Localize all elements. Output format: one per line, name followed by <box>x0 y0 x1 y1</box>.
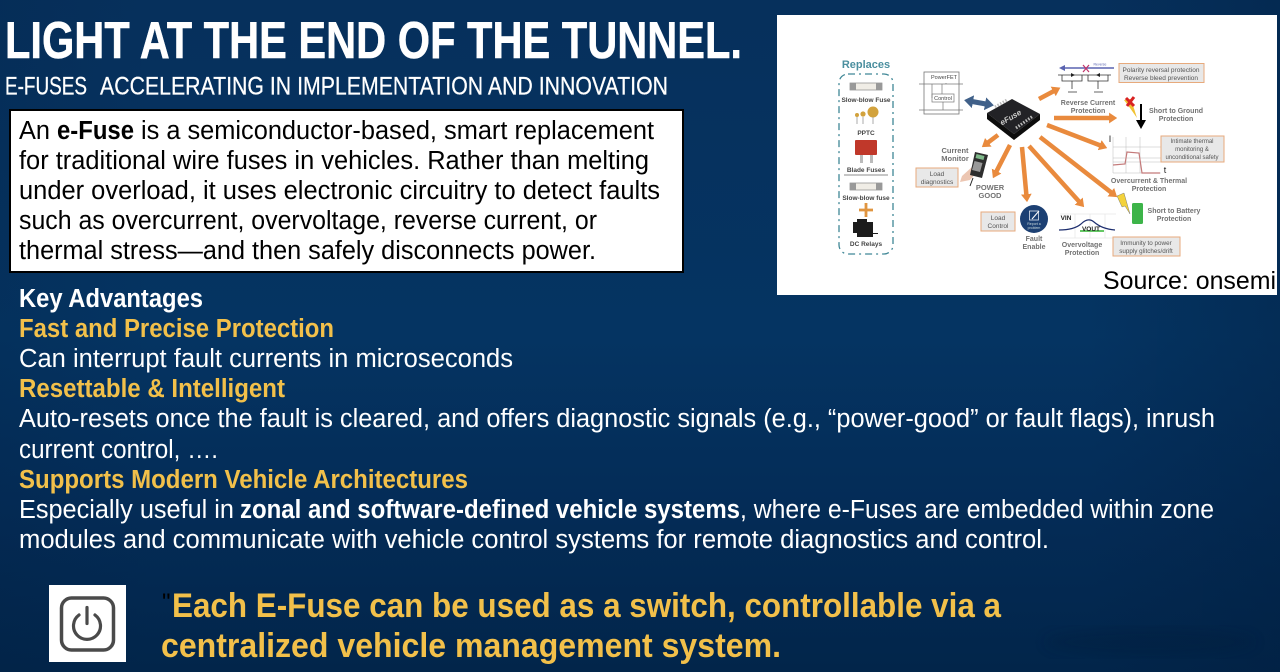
load control box: Load <box>991 215 1006 222</box>
panel: e-Fuse definition: e-Fuse <box>57 117 134 145</box>
immunity box: Immunity to power <box>1120 240 1172 247</box>
panel: e-Fuse definition <box>10 110 683 272</box>
thermal box: unconditional safety <box>1165 155 1219 161</box>
short to battery: Short to Battery <box>1148 208 1201 215</box>
polarity box: Polarity reversal protection <box>1123 67 1200 74</box>
overvoltage chart: VIN <box>1061 215 1072 222</box>
replaces column <box>839 59 893 254</box>
panel: e-Fuse definition: is a semiconductor-based, smart replacement <box>141 117 654 145</box>
advantage: resettable <box>19 375 1215 464</box>
advantage: resettable: Resettable & Intelligent <box>19 375 285 403</box>
advantage: modern architectures <box>19 466 1214 554</box>
overvoltage chart <box>1059 214 1116 257</box>
overcurrent chart: Overcurrent & Thermal <box>1111 178 1187 185</box>
advantage: modern architectures: Especially useful in <box>19 496 234 524</box>
advantage: modern architectures: zonal and software-defined vehicle systems <box>240 496 740 524</box>
quote <box>161 587 1002 665</box>
fault enable: Fault <box>1026 236 1043 243</box>
advantage: modern architectures: Supports Modern Vehicle Architectures <box>19 466 468 494</box>
reverse current protection: Reverse Current <box>1061 100 1116 107</box>
overcurrent chart: I <box>1109 134 1111 144</box>
polarity box <box>1119 64 1204 82</box>
thermal box: monitoring & <box>1175 147 1209 153</box>
key advantages heading: Key Advantages <box>19 285 203 313</box>
fault enable: problem <box>1028 226 1040 230</box>
load diagnostics box: diagnostics <box>921 179 954 186</box>
quote: Each E-Fuse can be used as a switch, controllable via a <box>172 587 1002 625</box>
overcurrent chart <box>1109 134 1187 193</box>
overvoltage chart: Protection <box>1065 250 1099 257</box>
chip: eFuse <box>998 108 1023 127</box>
load control box <box>981 212 1015 231</box>
panel: e-Fuse definition: under overload, it uses electronic circuitry to detect faults <box>19 177 660 205</box>
title: LIGHT AT THE END OF THE TUNNEL. <box>5 12 742 70</box>
current monitor: Monitor <box>941 154 969 163</box>
panel: e-Fuse definition: such as overcurrent, overvoltage, reverse current, or <box>19 207 597 235</box>
load control box: Control <box>988 223 1009 230</box>
overvoltage chart: VOUT <box>1082 226 1100 233</box>
overcurrent chart: t <box>1164 165 1167 175</box>
replaces column: DC Relays <box>850 241 882 248</box>
overcurrent chart: Protection <box>1132 186 1166 193</box>
reverse current protection <box>1058 62 1116 115</box>
icon: power button <box>49 585 126 662</box>
quote: centralized vehicle management system. <box>161 627 781 665</box>
panel: e-Fuse definition: thermal stress—and then safely disconnects power. <box>19 237 596 265</box>
short to battery: Protection <box>1157 216 1191 223</box>
chip <box>987 99 1040 140</box>
short to battery <box>1117 193 1201 224</box>
panel: e-Fuse definition: for traditional wire fuses in vehicles. Rather than melting <box>19 147 649 175</box>
reverse current protection: Protection <box>1071 108 1105 115</box>
advantage: modern architectures: modules and communicate with vehicle control systems for remote diagnostics and control. <box>19 526 1049 554</box>
load diagnostics box <box>916 168 958 187</box>
panel: e-Fuse definition: An <box>19 117 50 145</box>
diagram artwork <box>839 59 1224 257</box>
immunity box <box>1113 237 1180 256</box>
short to ground <box>1124 97 1203 129</box>
source credit: Source: onsemi <box>1103 267 1276 295</box>
load diagnostics box: Load <box>930 171 945 178</box>
subtitle: ACCELERATING IN IMPLEMENTATION AND INNOVATION <box>100 72 668 100</box>
replaces column: Blade Fuses <box>847 167 886 174</box>
thermal box: Intimate thermal <box>1170 139 1214 145</box>
fault enable: Report a <box>1027 222 1041 226</box>
replaces column: Replaces <box>842 59 890 71</box>
advantage: fast and precise <box>19 315 513 373</box>
arrows <box>988 91 1112 202</box>
current monitor <box>941 146 988 186</box>
quote: " <box>162 589 171 616</box>
blue double arrow <box>972 102 986 104</box>
overvoltage chart: Overvoltage <box>1062 242 1102 249</box>
PowerFET schematic: PowerFET <box>931 75 958 81</box>
advantage: modern architectures: , where e-Fuses are embedded within zone <box>740 496 1214 524</box>
advantage: resettable: Auto-resets once the fault is cleared, and offers diagnostic signals (e.g., “power-good” or fault flags), inrush <box>19 405 1215 433</box>
reverse current protection: Reverse <box>1093 62 1107 66</box>
current monitor: Current <box>941 146 969 155</box>
advantage: fast and precise: Can interrupt fault currents in microseconds <box>19 345 513 373</box>
replaces column: PPTC <box>857 130 875 137</box>
power good label <box>976 183 1005 200</box>
power good label: GOOD <box>979 191 1002 200</box>
short to ground: Protection <box>1159 116 1193 123</box>
PowerFET schematic <box>919 72 963 114</box>
advantage: resettable: current control, …. <box>19 436 218 464</box>
replaces column: Slow-blow fuse <box>842 195 890 202</box>
advantage: fast and precise: Fast and Precise Protection <box>19 315 334 343</box>
short to ground: Short to Ground <box>1149 108 1203 115</box>
fault enable: Enable <box>1023 244 1046 251</box>
panel: e-Fuse diagram image <box>777 15 1277 295</box>
power good label: POWER <box>976 183 1005 192</box>
thermal box <box>1161 136 1224 162</box>
immunity box: supply glitches/drift <box>1119 248 1173 255</box>
fault enable <box>1020 205 1048 251</box>
subtitle: E-FUSES <box>5 72 87 100</box>
replaces column: Slow-blow Fuse <box>841 97 891 104</box>
PowerFET schematic: Control <box>934 96 952 102</box>
polarity box: Reverse bleed prevention <box>1124 75 1198 82</box>
